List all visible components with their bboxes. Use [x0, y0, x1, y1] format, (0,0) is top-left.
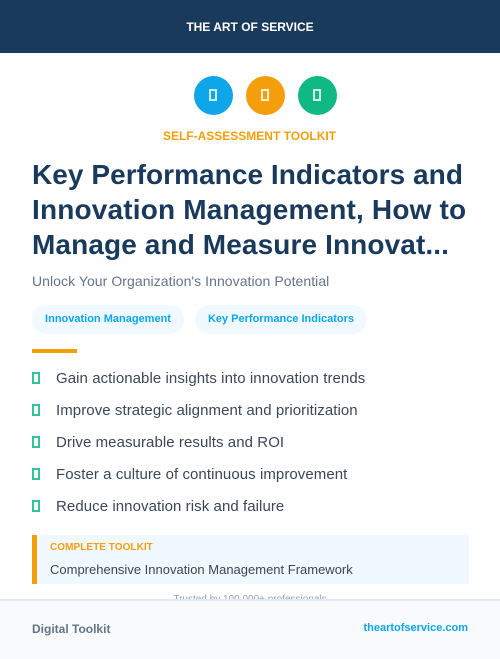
icon: green circle [298, 76, 337, 115]
accent rule [32, 349, 77, 353]
footer label: Digital Toolkit [32, 622, 110, 636]
benefits list [32, 370, 365, 515]
pill: innovation management [32, 305, 184, 334]
subtitle: Unlock Your Organization's Innovation Potential [32, 273, 329, 289]
callout text: Comprehensive Innovation Management Framework [50, 562, 353, 577]
eyebrow label: SELF-ASSESSMENT TOOLKIT [163, 129, 336, 143]
benefit 1: Gain actionable insights into innovation trends [56, 370, 365, 387]
benefit 2: Improve strategic alignment and prioritization [56, 402, 358, 419]
icon: blue circle [194, 76, 233, 115]
icon row [194, 76, 337, 115]
pill: innovation management: Innovation Management [45, 313, 171, 325]
title [32, 159, 466, 260]
title: Key Performance Indicators and [32, 159, 463, 190]
pill: key performance indicators [195, 305, 367, 334]
header band [0, 0, 500, 53]
title: Innovation Management, How to [32, 194, 466, 225]
benefit 3: Drive measurable results and ROI [56, 434, 284, 451]
tag pills [32, 305, 367, 334]
title: Manage and Measure Innovat... [32, 229, 449, 260]
pill: key performance indicators: Key Performance Indicators [208, 313, 354, 325]
callout [32, 535, 469, 584]
trust line: Trusted by 100,000+ professionals [173, 594, 327, 605]
benefit 5: Reduce innovation risk and failure [56, 498, 284, 515]
brand name: THE ART OF SERVICE [186, 20, 314, 34]
icon: orange circle [246, 76, 285, 115]
benefit 4: Foster a culture of continuous improvement [56, 466, 347, 483]
footer band [0, 599, 500, 659]
footer link: theartofservice.com [363, 622, 468, 634]
callout label: COMPLETE TOOLKIT [50, 542, 153, 553]
